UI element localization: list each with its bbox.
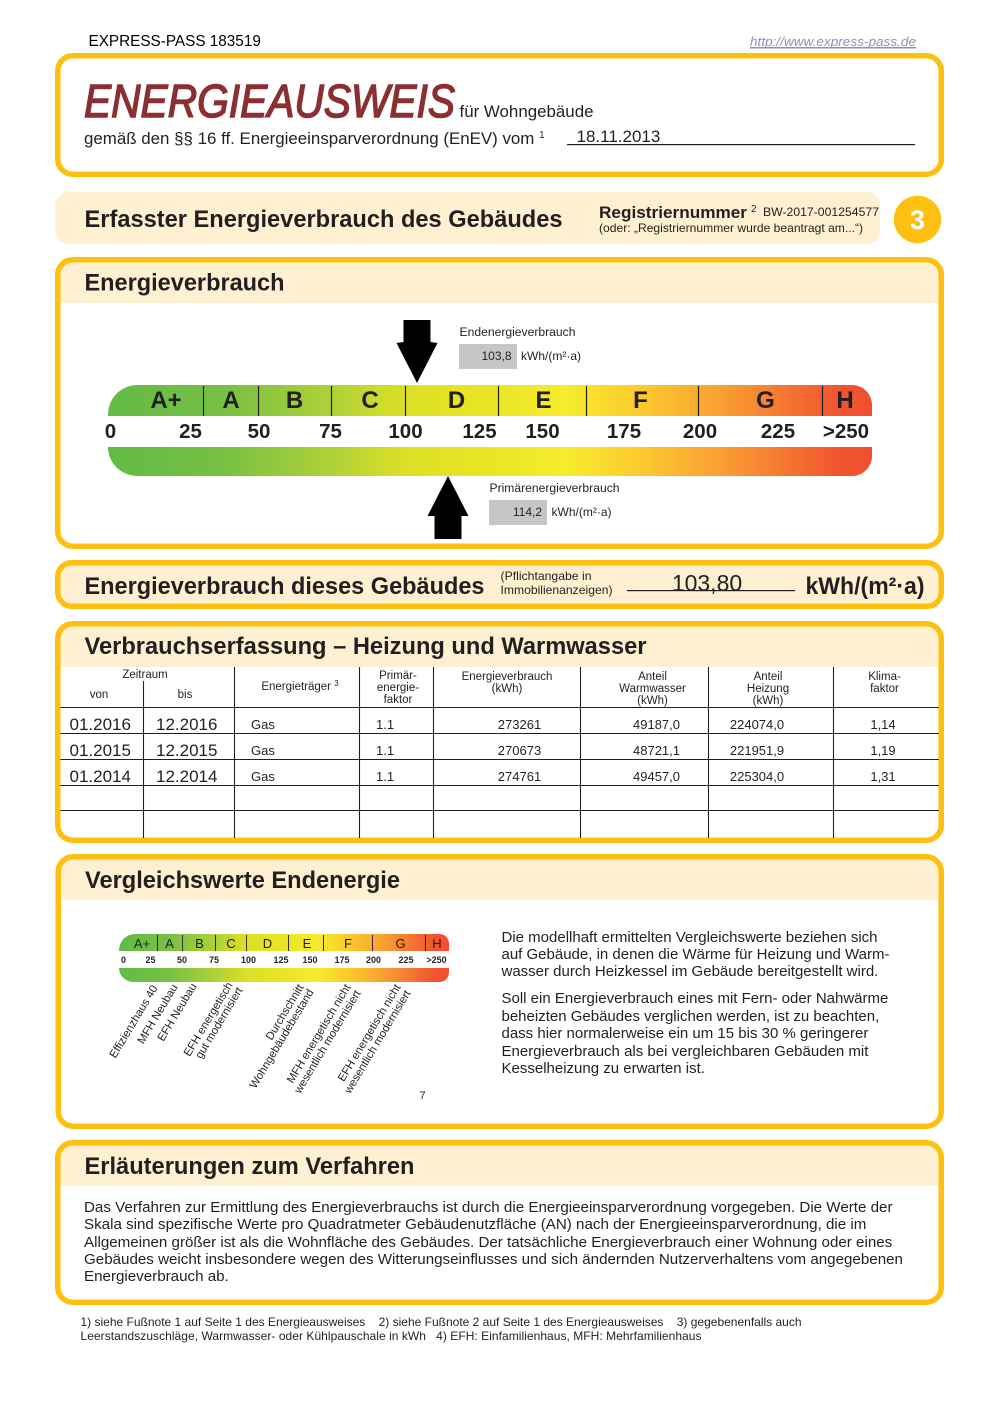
panel: consumption of this building <box>58 563 941 606</box>
explanatory text: auf Gebäude, in denen die Wärme für Heizung und Warm- <box>502 946 889 963</box>
table: consumption: Primär- <box>379 670 417 682</box>
subtitle: für Wohngebäude <box>460 102 593 121</box>
arrow: final energy <box>396 320 438 383</box>
comparison scale: 100 <box>241 955 256 965</box>
table: consumption: 274761 <box>498 769 541 784</box>
icon: page number badge <box>894 196 941 243</box>
panel: title <box>58 56 941 174</box>
comparison scale: H <box>432 936 442 951</box>
scale bar: A <box>222 387 240 414</box>
scale bar <box>105 385 872 476</box>
table: consumption: energie- <box>377 682 419 694</box>
table: consumption: bis <box>178 689 193 701</box>
table: consumption: Heizung <box>747 683 789 695</box>
table: consumption: 3 <box>334 679 339 688</box>
comparison scale: 50 <box>177 955 187 965</box>
callout: final energy: kWh/(m²·a) <box>521 349 581 363</box>
icon: page number badge: 3 <box>910 205 925 235</box>
table: consumption: (kWh) <box>492 683 522 695</box>
explanatory text: beheizten Gebäudes verglichen werden, ist zu beachten, <box>502 1008 879 1025</box>
table: consumption: 49457,0 <box>633 769 680 784</box>
rotated building labels: EFH Neubau <box>156 981 200 1044</box>
comparison scale: 175 <box>334 955 350 965</box>
scale bar: D <box>448 387 465 414</box>
panel: section heading: (oder: „Registriernummer wurde beantragt am...“) <box>599 221 863 235</box>
body text: Skala sind spezifische Werte pro Quadratmeter Gebäudenutzfläche (AN) nach der Energieeinsparverordnung, die im <box>84 1216 866 1233</box>
heading: Verbrauchserfassung – Heizung und Warmwasser <box>84 633 646 660</box>
callout: primary energy: kWh/(m²·a) <box>552 505 612 519</box>
rotated building labels: Effizienzhaus 40 <box>108 983 161 1060</box>
comparison scale: 75 <box>209 955 219 965</box>
table: consumption: Gas <box>251 717 275 732</box>
scale bar: 0 <box>105 420 116 443</box>
comparison scale: A+ <box>134 936 150 951</box>
scale bar: 150 <box>525 420 560 443</box>
explanatory text <box>500 929 889 1077</box>
callout: primary energy: 114,2 <box>513 505 542 519</box>
rotated building labels: wesentlich modernisiert <box>342 988 414 1097</box>
rotated building labels: MFH Neubau <box>136 982 181 1046</box>
table: consumption: 225304,0 <box>730 769 784 784</box>
body text: Gebäudes weicht insbesondere wegen des Witterungseinflusses und sich ändernden Nutzerverhaltens vom angegebenen <box>84 1251 903 1268</box>
table: consumption: Energieträger <box>261 681 331 693</box>
panel: consumption of this building: Immobilienanzeigen) <box>500 583 612 597</box>
registration number: Registriernummer <box>599 204 748 222</box>
callout: primary energy <box>489 481 620 525</box>
table: consumption: 224074,0 <box>730 717 784 732</box>
scale bar: A+ <box>150 387 182 414</box>
comparison scale: E <box>303 936 312 951</box>
footnotes: Leerstandszuschläge, Warmwasser- oder Kühlpauschale in kWh 4) EFH: Einfamilienhaus, MFH: Mehrfamilienhaus <box>80 1329 702 1343</box>
comparison scale: 125 <box>273 955 289 965</box>
comparison scale: >250 <box>426 955 447 965</box>
rotated building labels: Wohngebäudebestand <box>248 987 317 1091</box>
scale bar: E <box>535 387 552 414</box>
table: consumption: 1.1 <box>376 769 394 784</box>
table: consumption: Anteil <box>638 671 667 683</box>
footnote marker: 7 <box>420 1090 426 1102</box>
scale bar: C <box>361 387 379 414</box>
comparison scale: 225 <box>398 955 414 965</box>
comparison scale: 0 <box>121 955 126 965</box>
panel: Energieverbrauch <box>58 260 941 546</box>
rotated building labels: EFH energetisch <box>182 980 236 1059</box>
footnotes <box>80 1315 802 1343</box>
comparison scale <box>119 934 449 982</box>
rotated building labels <box>108 980 414 1097</box>
scale bar: 50 <box>248 420 270 443</box>
comparison scale: D <box>263 936 272 951</box>
explanatory text: Energieverbrauch als bei vergleichbaren Gebäuden mit <box>502 1043 869 1060</box>
note: (Pflichtangabe in <box>500 569 592 583</box>
heading: Energieverbrauch <box>84 270 284 296</box>
top reference line <box>88 33 916 50</box>
unit: kWh/(m²·a) <box>806 573 924 600</box>
footnotes: 1) siehe Fußnote 1 auf Seite 1 des Energieausweises 2) siehe Fußnote 2 auf Seite 1 des Energieausweises 3) gegebenenfalls auch <box>80 1315 802 1329</box>
table: consumption: Gas <box>251 743 275 758</box>
table: consumption: 12.2014 <box>156 767 217 786</box>
explanatory text: wasser durch Heizkessel im Gebäude bereitgestellt wird. <box>500 963 878 980</box>
arrow: primary energy <box>428 476 468 539</box>
table: consumption: 49187,0 <box>633 717 680 732</box>
table: consumption: (kWh) <box>753 695 783 707</box>
table: consumption: 1.1 <box>376 743 394 758</box>
heading: Erfasster Energieverbrauch des Gebäudes <box>84 206 562 233</box>
comparison scale: B <box>195 936 204 951</box>
table: consumption: 01.2015 <box>70 741 131 760</box>
body text: Das Verfahren zur Ermittlung des Energieverbrauchs ist durch die Energieeinsparverordnung vorgegeben. Die Werte der <box>84 1199 893 1216</box>
scale bar: 25 <box>179 420 202 443</box>
panel: Vergleichswerte <box>58 857 941 1126</box>
table: consumption: 1,14 <box>870 717 896 732</box>
rotated building labels: Durchschnitt <box>264 982 307 1042</box>
table: consumption: Warmwasser <box>619 683 686 695</box>
comparison scale: 150 <box>302 955 318 965</box>
callout: final energy: 103,8 <box>481 349 512 363</box>
scale bar: G <box>756 387 775 414</box>
rotated building labels: gut modernisiert <box>194 985 246 1061</box>
table: consumption: Anteil <box>754 671 782 683</box>
table: consumption: Gas <box>251 769 275 784</box>
comparison scale: C <box>226 936 236 951</box>
table: consumption: 273261 <box>498 717 541 732</box>
scale bar: H <box>836 387 854 414</box>
table: consumption: (kWh) <box>637 695 668 707</box>
scale bar: 125 <box>462 420 497 443</box>
table: consumption: 1.1 <box>376 717 394 732</box>
title: ENERGIEAUSWEIS <box>84 75 455 127</box>
table: consumption: 48721,1 <box>633 743 680 758</box>
panel: section heading <box>55 192 880 244</box>
date: 18.11.2013 <box>576 127 660 146</box>
table: consumption <box>60 667 939 838</box>
body text: Energieverbrauch ab. <box>84 1268 229 1285</box>
top reference line: http://www.express-pass.de <box>750 34 916 49</box>
panel: section heading: 2 <box>751 204 757 215</box>
table: consumption: 221951,9 <box>730 743 784 758</box>
table: consumption: von <box>90 689 108 701</box>
heading: Vergleichswerte Endenergie <box>85 867 400 894</box>
explanatory text: dass hier normalerweise ein um 15 bis 30 % geringerer <box>502 1025 868 1042</box>
heading: Energieverbrauch dieses Gebäudes <box>84 573 484 600</box>
scale bar: >250 <box>823 420 869 443</box>
table: consumption: Energieverbrauch <box>462 671 552 683</box>
body text: Allgemeinen größer ist als die Wohnfläche des Gebäudes. Der tatsächliche Energieverbrauch einer Wohnung oder eines <box>84 1234 893 1251</box>
table: consumption: faktor <box>870 683 899 695</box>
comparison scale: 200 <box>366 955 381 965</box>
legal basis: gemäß den §§ 16 ff. Energieeinsparverordnung (EnEV) vom <box>84 129 534 148</box>
legal basis: 1 <box>539 130 545 141</box>
table: consumption: Zeitraum <box>122 669 168 681</box>
comparison scale: F <box>344 936 352 951</box>
comparison scale: 25 <box>145 955 156 965</box>
panel: section heading: BW-2017-001254577 <box>763 206 879 219</box>
explanatory text: Die modellhaft ermittelten Vergleichswerte beziehen sich <box>502 929 878 946</box>
scale bar: F <box>633 387 648 414</box>
explanatory text: Kesselheizung zu erwarten ist. <box>502 1060 705 1077</box>
rotated building labels: EFH energetisch nicht <box>336 982 404 1084</box>
comparison scale: A <box>165 936 174 951</box>
table: consumption: faktor <box>384 694 413 706</box>
scale bar: B <box>286 387 303 414</box>
rotated building labels: MFH energetisch nicht <box>285 982 354 1085</box>
scale bar: 225 <box>761 420 795 443</box>
callout: final energy: Endenergieverbrauch <box>460 325 576 339</box>
table: consumption: 01.2016 <box>70 715 131 734</box>
top reference line: EXPRESS-PASS 183519 <box>88 33 261 50</box>
table: consumption: 270673 <box>498 743 541 758</box>
value: 103,80 <box>672 570 742 596</box>
callout: final energy <box>459 325 581 369</box>
table: consumption: 1,19 <box>870 743 896 758</box>
callout: primary energy: Primärenergieverbrauch <box>490 481 620 495</box>
heading: Erläuterungen zum Verfahren <box>84 1153 414 1180</box>
comparison scale: G <box>395 936 406 951</box>
explanatory text: Soll ein Energieverbrauch eines mit Fern- oder Nahwärme <box>502 990 888 1007</box>
table: consumption: Klima- <box>868 671 901 683</box>
body text <box>84 1199 903 1285</box>
scale bar: 100 <box>388 420 423 443</box>
table: consumption: 12.2015 <box>156 741 217 760</box>
scale bar: 75 <box>319 420 342 443</box>
table: consumption: 01.2014 <box>70 767 131 786</box>
table: consumption: 1,31 <box>870 769 896 784</box>
panel: Verbrauchserfassung <box>58 623 941 840</box>
panel: Erläuterungen <box>58 1143 941 1302</box>
scale bar: 175 <box>607 420 641 443</box>
rotated building labels: wesentlich modernisiert <box>292 988 364 1097</box>
table: consumption: 12.2016 <box>156 715 217 734</box>
scale bar: 200 <box>683 420 717 443</box>
